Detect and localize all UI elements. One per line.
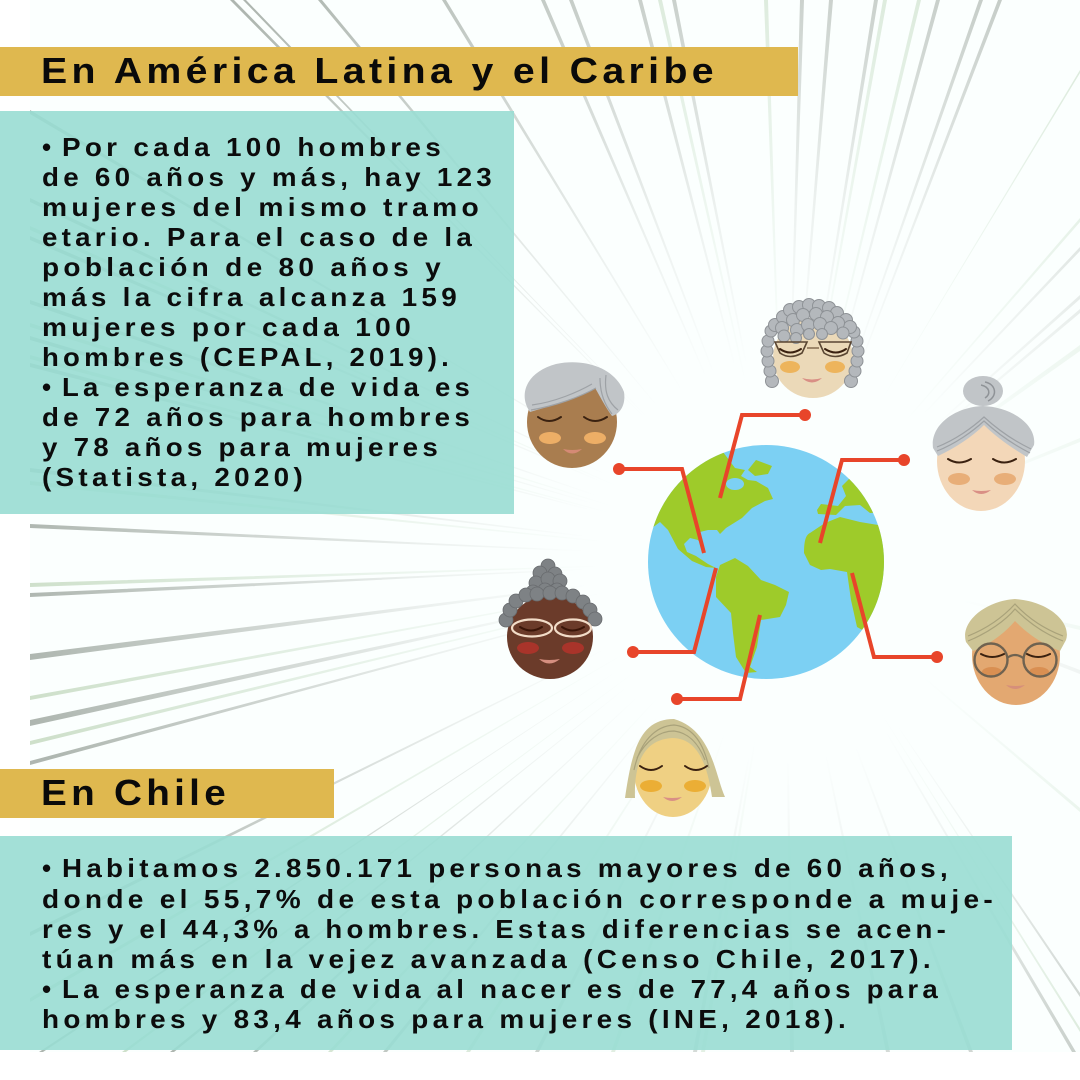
- panel: Chile text: res y el 44,3% a hombres. Estas diferencias se acen-: [42, 914, 950, 944]
- panel: América Latina text: [0, 111, 514, 514]
- panel: América Latina text: La esperanza de vida es: [62, 372, 474, 402]
- panel: Chile text: Habitamos 2.850.171 personas mayores de 60 años,: [62, 853, 952, 883]
- panel: Chile text: [0, 836, 1012, 1050]
- icon: brown-skinned woman with gray hair: [525, 362, 624, 468]
- panel: América Latina text: y 78 años para mujeres: [42, 432, 442, 462]
- panel: Chile text: •: [42, 853, 55, 883]
- heading: En América Latina y el Caribe: [0, 47, 798, 96]
- panel: Chile text: túan más en la vejez avanzada (Censo Chile, 2017).: [42, 944, 935, 974]
- heading: En América Latina y el Caribe: En América Latina y el Caribe: [41, 50, 718, 91]
- panel: América Latina text: etario. Para el caso de la: [42, 222, 476, 252]
- panel: América Latina text: de 72 años para hombres: [42, 402, 474, 432]
- icon: woman with blond hair: [625, 719, 725, 817]
- heading: En Chile: En Chile: [41, 772, 230, 813]
- panel: América Latina text: •: [42, 372, 55, 402]
- panel: América Latina text: Por cada 100 hombres: [62, 132, 445, 162]
- panel: América Latina text: más la cifra alcanza 159: [42, 282, 461, 312]
- panel: Chile text: donde el 55,7% de esta población corresponde a muje-: [42, 884, 997, 914]
- connector lines: [613, 409, 943, 705]
- globe: [648, 445, 884, 679]
- panel: América Latina text: hombres (CEPAL, 2019).: [42, 342, 453, 372]
- heading: En Chile: [0, 769, 334, 818]
- panel: Chile text: •: [42, 974, 55, 1004]
- panel: América Latina text: mujeres por cada 100: [42, 312, 415, 342]
- icon: dark-skinned woman with gray curls and white glasses: [499, 559, 602, 679]
- icon: woman with gray bun: [933, 376, 1034, 511]
- panel: América Latina text: de 60 años y más, hay 123: [42, 162, 496, 192]
- panel: Chile text: hombres y 83,4 años para mujeres (INE, 2018).: [42, 1004, 850, 1034]
- panel: América Latina text: población de 80 años y: [42, 252, 445, 282]
- icon: woman with round glasses and beige hair: [965, 599, 1067, 705]
- icon: woman with curly gray hair and half-moon glasses: [761, 298, 864, 398]
- panel: América Latina text: mujeres del mismo tramo: [42, 192, 483, 222]
- panel: América Latina text: •: [42, 132, 55, 162]
- panel: América Latina text: (Statista, 2020): [42, 462, 307, 492]
- panel: Chile text: La esperanza de vida al nacer es de 77,4 años para: [62, 974, 942, 1004]
